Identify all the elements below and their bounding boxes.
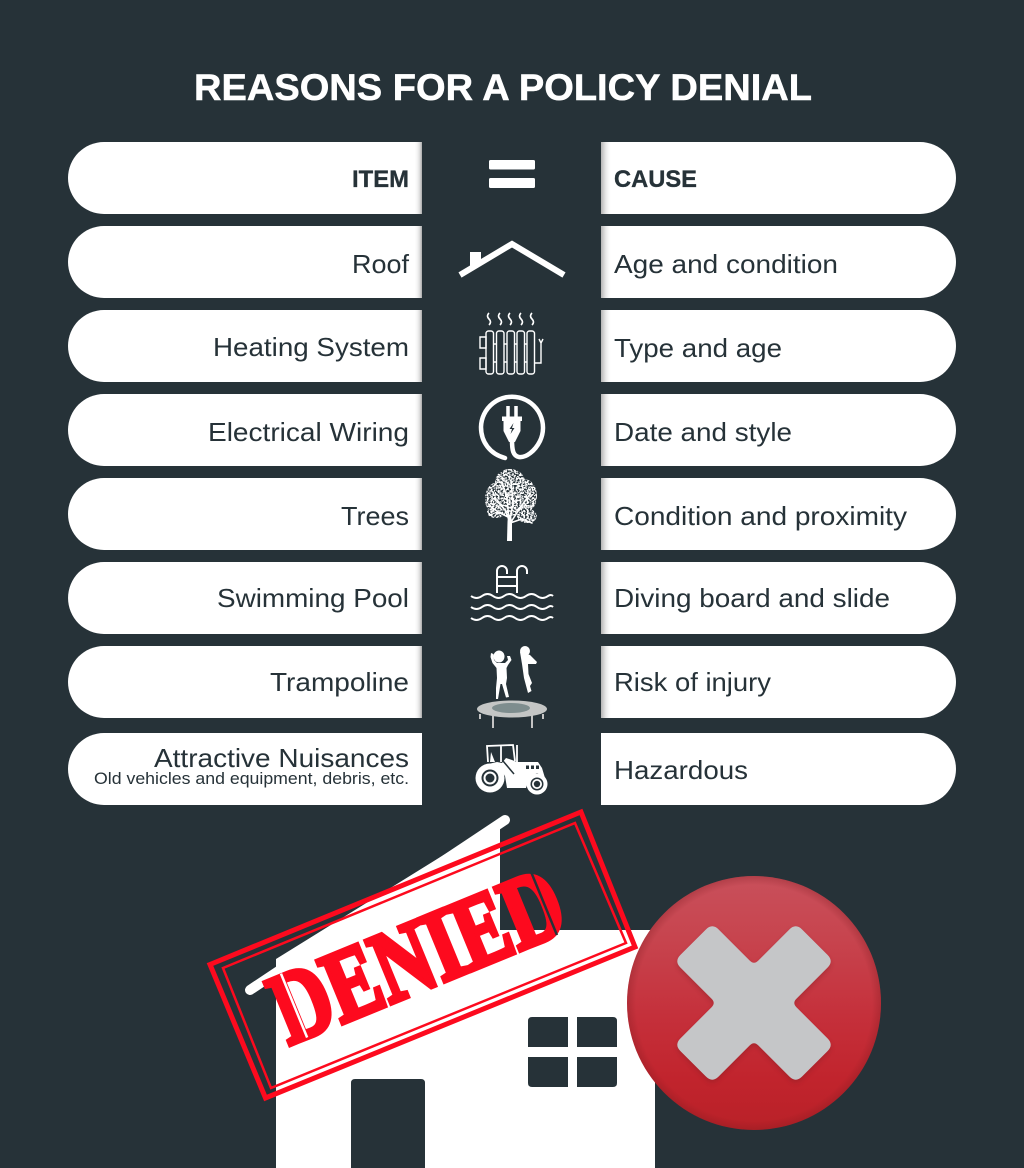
row: swimming pool: Swimming Pool — [217, 583, 409, 613]
row: electrical wiring: Date and style — [614, 417, 792, 447]
row: swimming pool — [68, 562, 956, 634]
denied stamp — [210, 812, 635, 1098]
row: swimming pool: Diving board and slide — [614, 583, 890, 613]
row: roof: Age and condition — [614, 249, 838, 279]
row: attractive nuisances: Hazardous — [614, 755, 748, 785]
house door — [351, 1079, 425, 1168]
row: trampoline: Risk of injury — [614, 667, 771, 697]
house window — [528, 1017, 617, 1087]
denied stamp: DENIED — [254, 845, 580, 1066]
icon: radiator — [480, 313, 543, 374]
row: trampoline: Trampoline — [270, 667, 409, 697]
red x button — [627, 876, 881, 1130]
icon: plug — [481, 397, 543, 458]
row: header — [68, 142, 956, 214]
icon: tractor — [476, 745, 548, 794]
icon: roof — [460, 244, 564, 275]
icon: trampoline — [477, 646, 547, 728]
row: electrical wiring — [68, 394, 956, 466]
row: trees: Trees — [341, 501, 409, 531]
icon: tree — [485, 469, 537, 541]
row: header: ITEM — [352, 166, 409, 193]
row: heating system: Heating System — [213, 332, 409, 362]
row: heating system — [68, 310, 956, 382]
title: REASONS FOR A POLICY DENIAL — [194, 67, 812, 108]
row: header: CAUSE — [614, 166, 697, 193]
row: heating system: Type and age — [614, 333, 782, 363]
row: trampoline — [68, 646, 956, 718]
row: roof — [68, 226, 956, 298]
row: attractive nuisances — [68, 733, 956, 805]
house illustration — [250, 820, 655, 1168]
row: electrical wiring: Electrical Wiring — [208, 417, 409, 447]
row: attractive nuisances: Old vehicles and equipment, debris, etc. — [94, 769, 409, 788]
row: trees — [68, 478, 956, 550]
row: attractive nuisances: Attractive Nuisances — [154, 743, 409, 773]
icon: pool — [471, 566, 553, 620]
row: roof: Roof — [352, 249, 410, 279]
x mark — [631, 881, 877, 1127]
row: trees: Condition and proximity — [614, 501, 907, 531]
icon: equals — [489, 160, 535, 188]
